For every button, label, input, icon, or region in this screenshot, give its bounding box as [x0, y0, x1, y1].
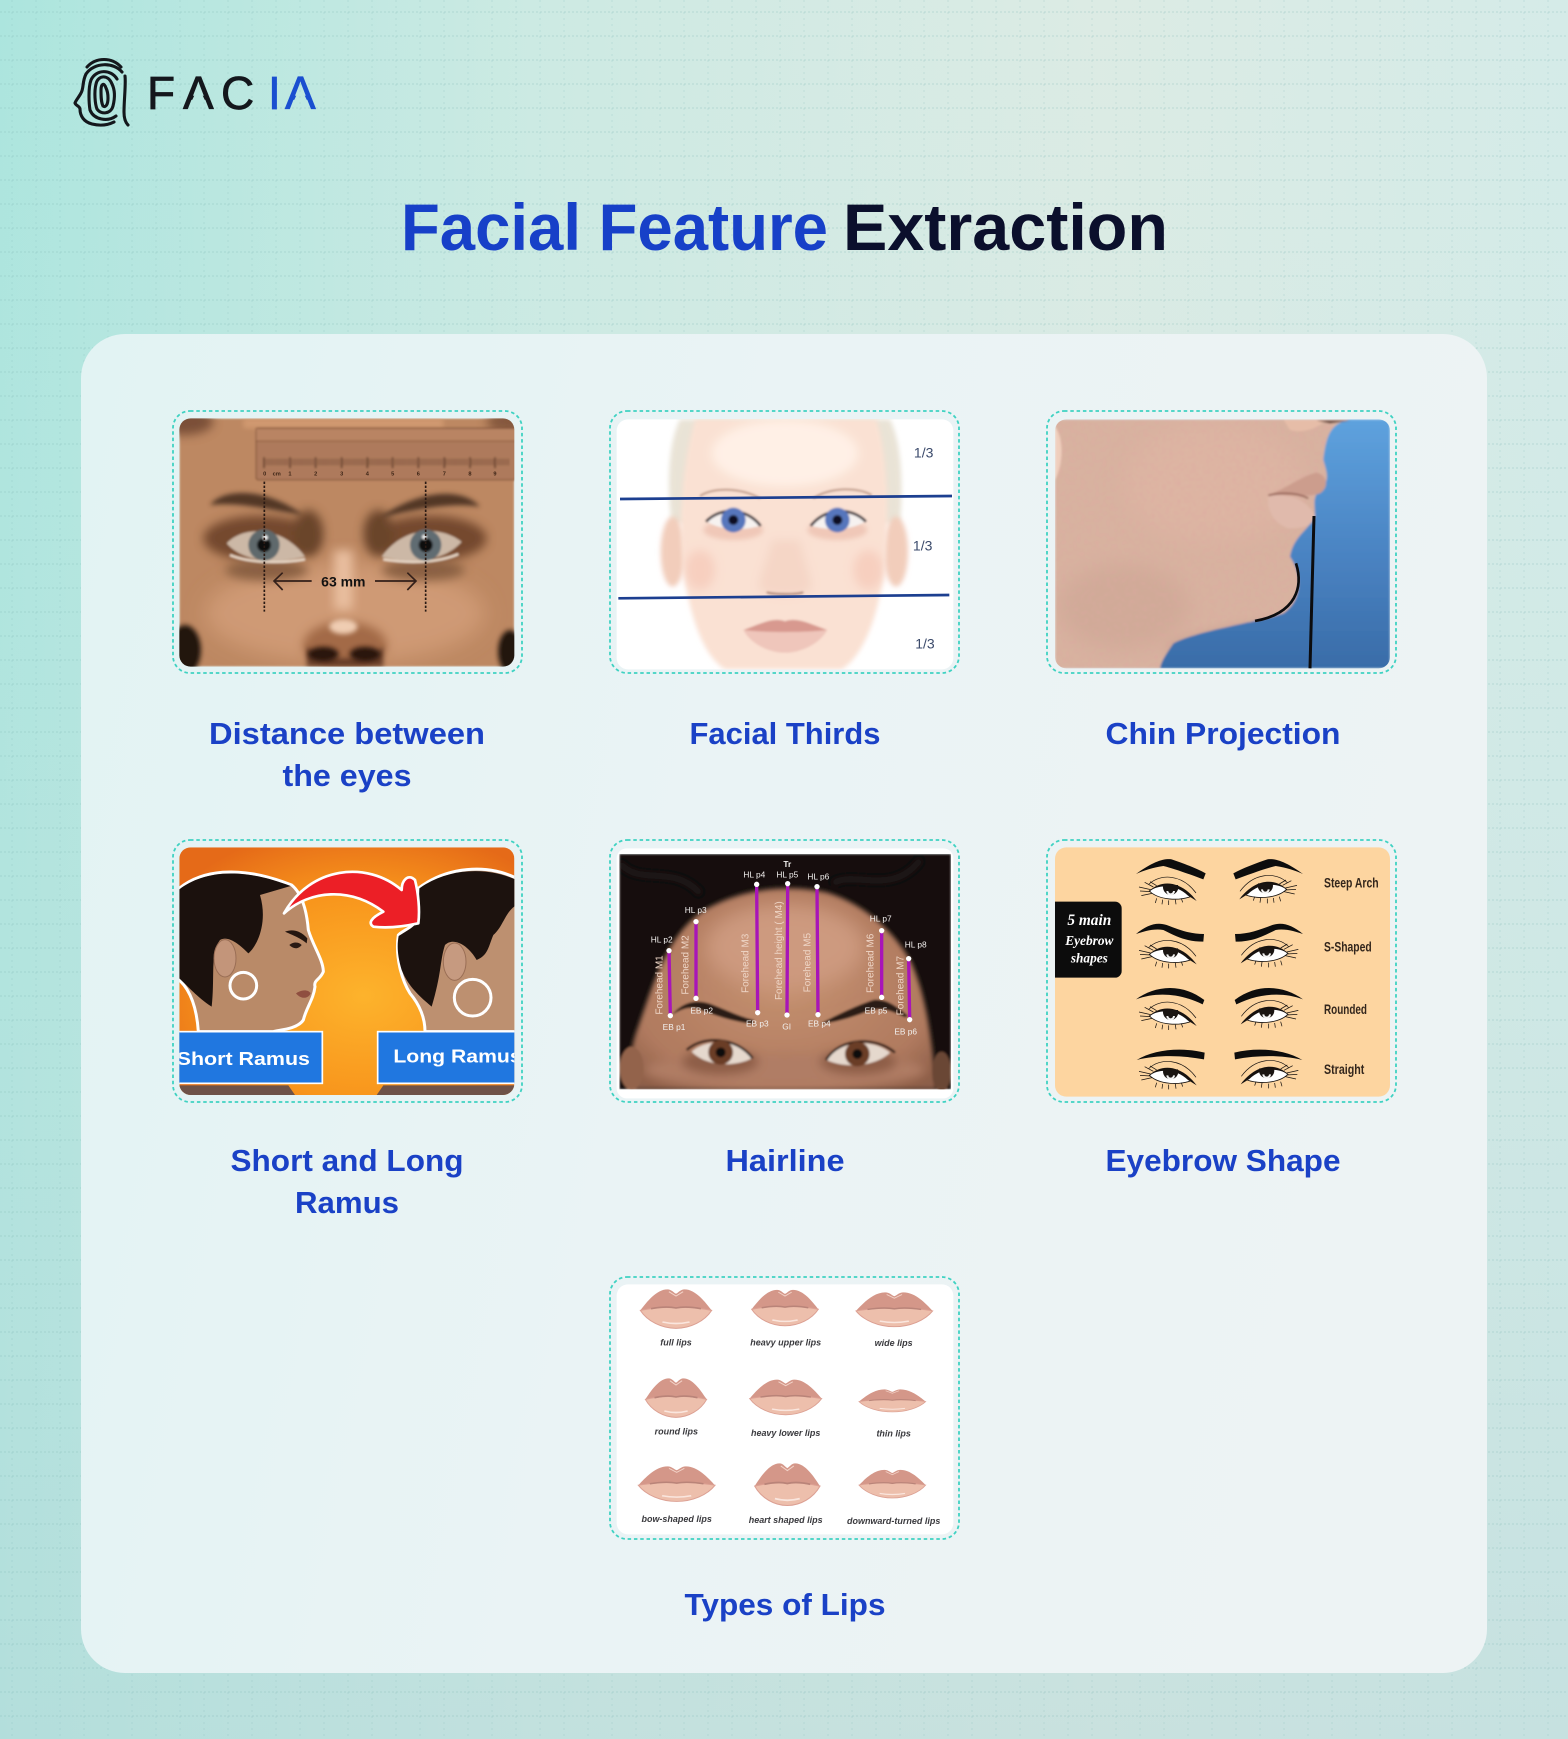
thirds lines: [618, 496, 952, 598]
left head: [179, 872, 323, 1032]
lips labels: bow-shaped lips: [641, 1514, 712, 1524]
caption: Chin Projection: [1106, 716, 1340, 751]
shape labels: Straight: [1324, 1061, 1365, 1077]
ruler numbers: 9: [493, 471, 497, 477]
lips labels: downward-turned lips: [847, 1516, 940, 1526]
thirds labels: 1/3: [914, 444, 934, 460]
point labels: [651, 859, 927, 1037]
card: short and long ramus: [173, 840, 524, 1220]
chart: eyebrow shapes: [1055, 847, 1390, 1097]
ruler numbers: 0: [263, 471, 266, 477]
point labels: HL p4: [743, 869, 766, 879]
title: Extraction: [843, 190, 1168, 264]
point labels: GI: [782, 1022, 791, 1032]
point labels: EB p5: [865, 1005, 888, 1015]
caption: Ramus: [295, 1185, 399, 1220]
card: eyebrow shape: [1047, 840, 1396, 1178]
card: types of lips: [610, 1277, 959, 1622]
icon: fingerprint head: [75, 60, 128, 125]
forehead labels: Forehead M7: [896, 956, 907, 1015]
right head: [397, 869, 517, 1032]
lips shapes: [638, 1289, 933, 1506]
brows: [1136, 859, 1303, 1060]
point labels: EB p1: [663, 1022, 686, 1032]
caption: Eyebrow Shape: [1106, 1143, 1340, 1178]
ruler numbers: 8: [468, 471, 472, 477]
label: short ramus: Short Ramus: [177, 1048, 310, 1069]
point labels: HL p8: [905, 939, 927, 949]
caption: Types of Lips: [684, 1587, 886, 1622]
caption: Short and Long: [230, 1143, 464, 1178]
point labels: EB p2: [690, 1006, 713, 1016]
main panel: [81, 334, 1487, 1673]
point labels: HL p6: [807, 871, 830, 881]
point labels: HL p5: [776, 869, 799, 879]
lips labels: round lips: [655, 1427, 698, 1437]
measurement: 63 mm: [321, 574, 365, 590]
eyes: [1139, 875, 1298, 1089]
ruler numbers: 3: [340, 471, 343, 477]
arrow: red curve: [284, 872, 419, 927]
thirds labels: 1/3: [913, 538, 933, 554]
dashed frame: [610, 1277, 959, 1539]
chart: lip types: [617, 1284, 953, 1534]
badge: 5 main eyebrow shapes: [1055, 902, 1122, 978]
caption: Hairline: [726, 1143, 844, 1178]
title: Facial Feature: [401, 190, 828, 264]
bottom band: [179, 1085, 514, 1095]
ruler numbers: 2: [314, 471, 317, 477]
measurement points: [666, 881, 912, 1022]
photo: ramus comparison: [173, 847, 524, 1095]
card: distance between the eyes: [153, 408, 533, 793]
lips labels: heart shaped lips: [749, 1515, 823, 1525]
lips labels: wide lips: [875, 1338, 913, 1348]
ruler numbers: 1: [288, 471, 292, 477]
caption: [230, 1143, 464, 1220]
shape labels: [1324, 874, 1379, 1077]
photo: forehead measurements: [617, 848, 953, 1098]
arrow: right: [375, 573, 416, 590]
photo: eyes with ruler: [179, 418, 514, 667]
title: [401, 190, 1168, 264]
lips labels: heavy lower lips: [751, 1428, 820, 1438]
dashed frame: [173, 840, 522, 1102]
ruler numbers: 7: [443, 471, 446, 477]
ruler numbers: cm: [273, 471, 281, 477]
shape labels: Rounded: [1324, 1001, 1367, 1017]
point labels: EB p6: [894, 1027, 917, 1037]
photo: face with thirds: [617, 419, 953, 669]
forehead labels: [655, 901, 907, 1015]
point labels: EB p3: [746, 1019, 769, 1029]
thirds labels: [913, 444, 935, 652]
point labels: Tr: [783, 859, 792, 869]
point labels: HL p7: [870, 914, 892, 924]
ramus circles: [230, 972, 491, 1016]
caption: the eyes: [282, 758, 412, 793]
chin contour: [1255, 563, 1299, 621]
ruler numbers: 6: [417, 471, 420, 477]
point labels: HL p3: [685, 905, 707, 915]
caption: Distance between: [209, 716, 485, 751]
dashed frame: [173, 411, 522, 673]
forehead labels: Forehead M2: [681, 935, 692, 995]
arrow: left: [274, 573, 312, 590]
caption: [209, 716, 485, 793]
thirds labels: 1/3: [915, 636, 935, 652]
card: chin projection: [1047, 411, 1396, 751]
lips labels: full lips: [660, 1337, 692, 1347]
card: facial thirds: [610, 411, 959, 751]
point labels: EB p4: [808, 1019, 831, 1029]
label: long ramus: Long Ramus: [393, 1045, 522, 1066]
forehead labels: Forehead height ( M4): [774, 901, 785, 1000]
forehead labels: Forehead M1: [655, 955, 666, 1015]
photo: chin profile: [1055, 419, 1390, 668]
projection line: [1310, 516, 1314, 668]
badge: 5 main eyebrow shapes: Eyebrow: [1064, 933, 1113, 948]
lips labels: thin lips: [876, 1429, 911, 1439]
badge: 5 main eyebrow shapes: shapes: [1070, 951, 1108, 966]
ruler numbers: 5: [391, 471, 394, 477]
lips labels: heavy upper lips: [750, 1337, 821, 1347]
badge: 5 main eyebrow shapes: 5 main: [1067, 912, 1111, 929]
point labels: HL p2: [651, 935, 673, 945]
ruler numbers: [263, 471, 497, 477]
label: long ramus: [378, 1032, 524, 1083]
dashed frame: [1047, 411, 1396, 673]
dashed frame: [610, 411, 959, 673]
dashed frame: [610, 840, 959, 1102]
caption: Facial Thirds: [690, 716, 880, 751]
card: hairline: [610, 840, 959, 1178]
logo: Facia: [75, 60, 316, 125]
measurement lines: [669, 884, 910, 1020]
shape labels: S-Shaped: [1324, 938, 1372, 954]
forehead labels: Forehead M5: [802, 933, 813, 992]
label: short ramus: [173, 1032, 322, 1083]
shape labels: Steep Arch: [1324, 874, 1379, 890]
ruler numbers: 4: [366, 471, 370, 477]
lips labels: [641, 1337, 940, 1526]
wordmark: FAC IA: [147, 67, 316, 119]
dashed frame: [1047, 840, 1396, 1102]
forehead labels: Forehead M6: [866, 933, 877, 993]
measure lines: [264, 482, 426, 612]
forehead labels: Forehead M3: [741, 933, 752, 993]
